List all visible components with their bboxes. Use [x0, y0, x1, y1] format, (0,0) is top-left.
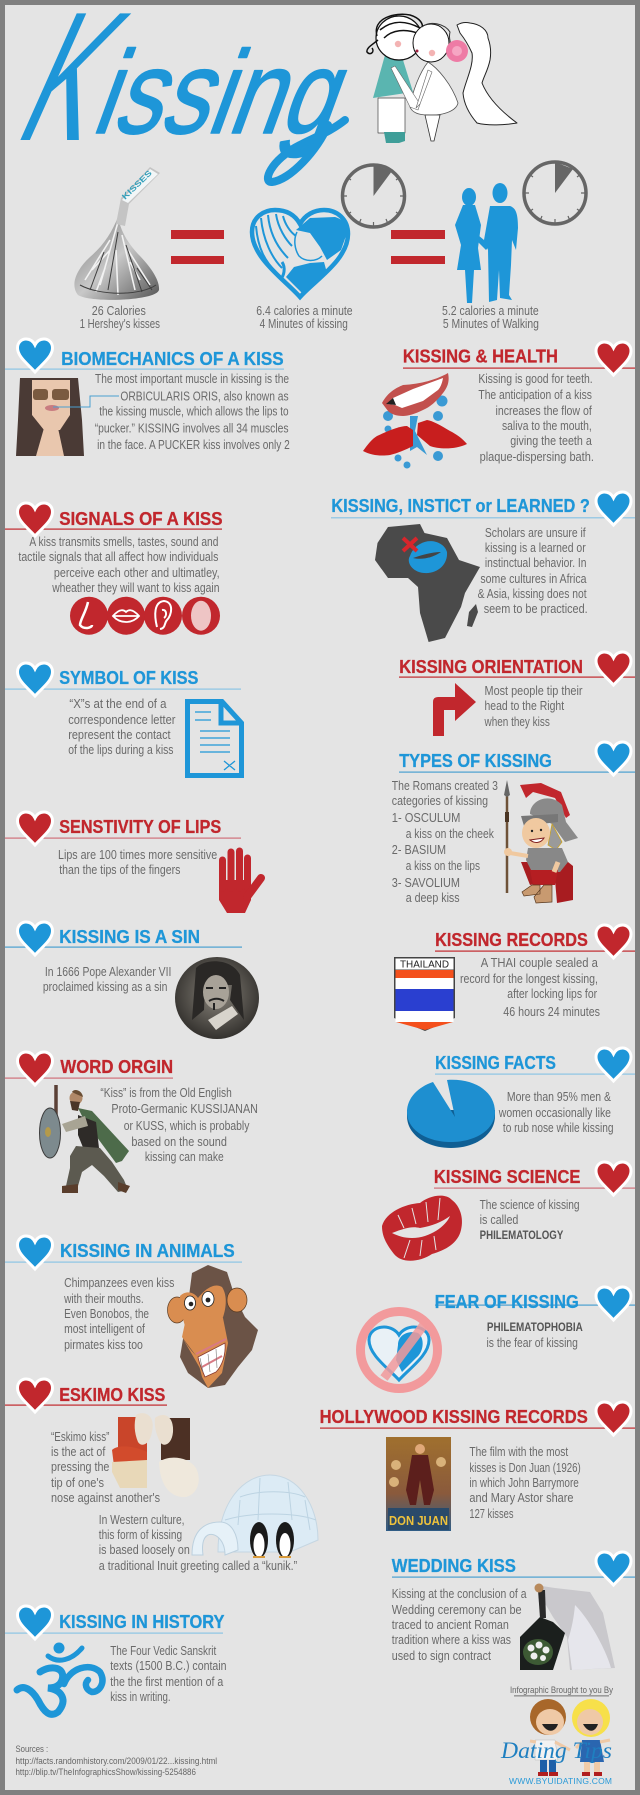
body text: represent the contact	[68, 728, 171, 742]
body text: is the fear of kissing	[486, 1336, 578, 1350]
body text: western culture: a traditional Inuit greeting called a “kunik.”	[99, 1559, 297, 1573]
heading	[5, 1052, 173, 1085]
body text: is the act of	[51, 1445, 106, 1459]
title	[0, 0, 369, 182]
icon: clock, 4 minutes	[342, 165, 404, 227]
panel: signals of a kiss	[5, 503, 222, 635]
panel: kissing is a sin	[5, 922, 259, 1039]
body text: proclaimed kissing as a sin	[43, 980, 167, 994]
logo text: Dating Tips	[500, 1738, 612, 1763]
body text: 46 hours 24 minutes	[503, 1005, 600, 1019]
body text: 1- OSCULUM	[392, 811, 460, 825]
body text: A kiss transmits smells, tastes, sound and	[29, 535, 218, 549]
body text: record for the longest kissing,	[460, 972, 598, 986]
body text	[110, 1644, 227, 1704]
sources: http://blip.tv/TheInfographicsShow/kissing-5254886	[16, 1767, 196, 1777]
body text	[478, 372, 594, 464]
body text: a deep kiss	[406, 891, 460, 905]
body text: used to sign contract	[392, 1649, 491, 1663]
icons: nose, lips, ear, fingerprint	[70, 597, 220, 635]
heading: SENSTIVITY OF LIPS	[59, 816, 221, 837]
body text: kissing can make	[145, 1150, 224, 1164]
illustration: igloo and penguins	[192, 1475, 318, 1558]
panel: symbol of kiss	[5, 663, 242, 776]
body text: instinctual behavior. In	[485, 556, 587, 570]
body text	[63, 1276, 174, 1352]
icon: kissing couple heart	[252, 210, 348, 297]
body text: plaque-dispersing bath.	[480, 450, 594, 464]
icon: walking couple silhouette	[455, 183, 518, 303]
heading	[399, 742, 635, 775]
body text: kissing is a learned or	[485, 541, 586, 555]
sources	[16, 1744, 217, 1777]
icon: first equals sign	[171, 230, 224, 264]
body text	[392, 1587, 527, 1663]
panel: eskimo kiss	[5, 1379, 318, 1573]
heading: KISSING IN ANIMALS	[60, 1240, 235, 1261]
body text: with their mouths.	[63, 1292, 144, 1306]
icon: Thailand flag shield: THAILAND	[400, 958, 449, 970]
heading: HOLLYWOOD KISSING RECORDS	[320, 1406, 588, 1427]
heading	[331, 492, 635, 525]
panel: kissing orientation	[399, 652, 635, 736]
body text: western culture	[99, 1513, 297, 1573]
panel: kissing science	[382, 1162, 635, 1261]
heading: WEDDING KISS	[392, 1555, 516, 1576]
body text	[469, 1445, 581, 1521]
body text: nose against another's	[51, 1491, 160, 1505]
heading	[434, 1162, 635, 1195]
body text: “pucker.” KISSING involves all 34 muscles	[95, 421, 289, 435]
heading: KISSING IN HISTORY	[59, 1611, 225, 1632]
body text: in the face. A PUCKER kiss involves only 2	[97, 438, 290, 452]
icon: om symbol	[17, 1642, 102, 1714]
heading: KISSING IS A SIN	[59, 926, 200, 947]
credit: dating tips logo	[500, 1685, 613, 1786]
heading	[5, 1606, 225, 1639]
body text: Lips are 100 times more sensitive	[58, 848, 217, 862]
calorie captions	[80, 304, 539, 331]
body text	[480, 1198, 580, 1242]
body text: seem to be practiced.	[484, 602, 588, 616]
body text: when they kiss	[484, 715, 550, 729]
body text: Wedding ceremony can be	[392, 1603, 522, 1617]
heading	[5, 339, 284, 372]
body text: of the lips during a kiss	[68, 743, 174, 757]
heading: BIOMECHANICS OF A KISS	[61, 348, 284, 369]
heading	[5, 663, 241, 696]
body text: 127 kisses	[469, 1507, 514, 1521]
body text: head to the Right	[484, 699, 565, 713]
body text	[484, 684, 582, 729]
body text: tip of one's	[51, 1476, 104, 1490]
body text: The Romans created 3	[392, 779, 498, 793]
body text: correspondence letter	[68, 713, 176, 727]
heading: KISSING ORIENTATION	[399, 656, 583, 677]
body text: texts (1500 B.C.) contain	[110, 1659, 227, 1673]
image: wedding couple kissing under veil	[520, 1584, 615, 1670]
body text: The film with the most	[469, 1445, 569, 1459]
body text: most intelligent of	[64, 1322, 145, 1336]
panel: fear of kissing	[360, 1287, 635, 1388]
body text: a kiss on the cheek	[406, 827, 495, 841]
illustration: Africa map with kiss	[375, 524, 480, 642]
heading: KISSING, INSTICT or LEARNED ?	[331, 495, 590, 516]
body text: tradition where a kiss was	[392, 1633, 511, 1647]
body text: than the tips of the fingers	[59, 863, 180, 877]
callout line to lips	[53, 396, 119, 407]
heading	[320, 1402, 635, 1435]
body text: ORBICULARIS ORIS, also known as	[120, 390, 289, 404]
heading	[435, 1287, 635, 1320]
body text: Even Bonobos, the	[64, 1307, 149, 1321]
panel: kissing facts	[407, 1048, 635, 1148]
heading	[399, 652, 635, 685]
body text	[486, 1320, 583, 1350]
panel: types of kissing	[392, 742, 635, 905]
body text: the the first mention of a	[110, 1675, 223, 1689]
panel: kissing records	[394, 925, 635, 1031]
panel: kissing and health	[363, 342, 635, 468]
heading: FEAR OF KISSING	[435, 1291, 579, 1312]
heading	[5, 1379, 167, 1412]
panel: sensitivity of lips	[5, 812, 261, 913]
body text: kiss in writing.	[110, 1690, 171, 1704]
illustration: viking warrior	[40, 1085, 130, 1193]
calorie captions: 5.2 calories a minute	[442, 304, 539, 318]
body text	[498, 1090, 614, 1135]
body text: & Asia, kissing does not	[478, 587, 587, 601]
website: WWW.BYUIDATING.COM	[509, 1776, 612, 1786]
body text: A THAI couple sealed a	[481, 956, 598, 970]
icon: clock, 5 minutes	[524, 162, 586, 224]
body text: PHILEMATOLOGY	[480, 1228, 563, 1242]
panel: kissing in history	[5, 1606, 227, 1714]
calorie captions: 26 Calories	[92, 304, 146, 318]
body text: some cultures in Africa	[480, 572, 587, 586]
body text	[58, 848, 217, 877]
panel: wedding kiss	[392, 1552, 635, 1670]
heading	[392, 1552, 635, 1585]
body text: 3- SAVOLIUM	[392, 876, 460, 890]
body text: More than 95% men &	[507, 1090, 612, 1104]
heading: KISSING & HEALTH	[403, 346, 558, 367]
panel: kissing in animals	[5, 1236, 258, 1388]
body text: traced to ancient Roman	[392, 1618, 509, 1632]
heading	[5, 922, 242, 955]
icon: letter document	[188, 701, 242, 776]
heading	[5, 503, 222, 536]
heading	[435, 925, 635, 958]
body text: Kissing is good for teeth.	[478, 372, 593, 386]
body text: pressing the	[51, 1460, 109, 1474]
panel: biomechanics of a kiss	[5, 339, 290, 456]
body text: is called	[480, 1213, 518, 1227]
title: issing	[81, 26, 369, 158]
body text: giving the teeth a	[510, 434, 592, 448]
body text: Scholars are unsure if	[485, 526, 586, 540]
body text: to rub nose while kissing	[503, 1121, 614, 1135]
heading	[5, 812, 241, 845]
illustration: cartoon couple	[530, 1699, 610, 1776]
body text	[68, 697, 176, 757]
illustration: bride and groom kissing	[367, 14, 517, 143]
illustration: Roman soldier	[504, 780, 578, 903]
body text: Proto-Germanic KUSSIJANAN	[111, 1102, 258, 1116]
calorie captions: 5 Minutes of Walking	[443, 317, 539, 331]
body text	[43, 965, 171, 994]
body text	[51, 1430, 160, 1505]
heading: SIGNALS OF A KISS	[59, 508, 223, 529]
body text: “Eskimo kiss”	[51, 1430, 109, 1444]
heading	[403, 342, 635, 375]
image: eskimo figurines	[112, 1413, 199, 1497]
body text	[392, 779, 498, 905]
body text: The Four Vedic Sanskrit	[110, 1644, 217, 1658]
body text: Most people tip their	[484, 684, 582, 698]
body text	[100, 1086, 258, 1164]
body text: tactile signals that all affect how individuals	[18, 550, 218, 564]
panel: hollywood kissing records	[320, 1402, 635, 1531]
illustration: grinning chimpanzee	[168, 1265, 258, 1388]
heading: KISSING FACTS	[435, 1052, 556, 1073]
heading	[5, 1236, 242, 1269]
heading: TYPES OF KISSING	[399, 750, 552, 771]
body text: western culture: In Western culture,	[99, 1513, 184, 1527]
body text: saliva to the mouth,	[502, 419, 592, 433]
image: portrait of Pope Alexander VII	[175, 957, 259, 1039]
heading: SYMBOL OF KISS	[59, 667, 198, 688]
calorie captions: 1 Hershey's kisses	[80, 317, 160, 331]
image: Don Juan movie poster: DON JUAN	[389, 1513, 448, 1528]
icon: no-kissing sign	[360, 1312, 438, 1388]
body text: 2- BASIUM	[392, 843, 446, 857]
heading: WORD ORGIN	[60, 1056, 173, 1077]
body text: western culture: is based loosely on	[99, 1543, 190, 1557]
body text: categories of kissing	[392, 794, 488, 808]
body text: Chimpanzees even kiss	[64, 1276, 174, 1290]
body text: kisses is Don Juan (1926)	[469, 1461, 581, 1475]
icon: second equals sign	[391, 230, 445, 264]
body text	[18, 535, 220, 595]
icon: lipstick kiss mark	[382, 1196, 462, 1261]
body text: or KUSS, which is probably	[124, 1119, 250, 1133]
icon: Thailand flag shield	[394, 957, 455, 1031]
heading: KISSING SCIENCE	[434, 1166, 580, 1187]
body text: Kissing at the conclusion of a	[392, 1587, 527, 1601]
body text	[478, 526, 588, 616]
heading: ESKIMO KISS	[59, 1384, 165, 1405]
body text: women occasionally like	[498, 1106, 611, 1120]
icon: Hershey's kiss	[74, 167, 160, 300]
body text: and Mary Astor share	[469, 1491, 574, 1505]
body text: perceive each other and ultimatley,	[54, 566, 220, 580]
body text: pirmates kiss too	[64, 1338, 143, 1352]
image: Don Juan movie poster	[386, 1437, 451, 1531]
body text: western culture: this form of kissing	[99, 1528, 182, 1542]
body text: in which John Barrymore	[469, 1476, 579, 1490]
calorie captions: 6.4 calories a minute	[256, 304, 353, 318]
body text	[95, 372, 290, 452]
panel: kissing, instinct or learned	[331, 492, 635, 642]
heading: KISSING RECORDS	[435, 929, 588, 950]
body text: after locking lips for	[507, 987, 597, 1001]
panel: word origin	[5, 1052, 258, 1193]
pie chart: 95 percent	[407, 1080, 495, 1148]
sources: http://facts.randomhistory.com/2009/01/22...kissing.html	[16, 1756, 217, 1766]
icon: red hand	[219, 851, 261, 913]
body text	[460, 956, 600, 1019]
sources: Sources :	[16, 1744, 48, 1754]
icon: right turn arrow	[433, 683, 476, 736]
panel: calorie equivalents	[74, 162, 586, 331]
image: woman in sunglasses	[16, 378, 84, 456]
body text: a kiss on the lips	[406, 859, 480, 873]
body text: based on the sound	[131, 1135, 227, 1149]
body text: In 1666 Pope Alexander VII	[45, 965, 171, 979]
credit line: Infographic Brought to you By	[510, 1685, 613, 1695]
body text: The science of kissing	[480, 1198, 580, 1212]
body text: the kissing muscle, which allows the lips to	[99, 405, 289, 419]
body text: “Kiss” is from the Old English	[100, 1086, 232, 1100]
body text: The most important muscle in kissing is the	[95, 372, 289, 386]
calorie captions: 4 Minutes of kissing	[260, 317, 348, 331]
body text: The anticipation of a kiss	[478, 388, 592, 402]
icon: Hershey's kiss: KISSES	[120, 168, 154, 201]
body text: “X”s at the end of a	[69, 697, 167, 711]
body text: PHILEMATOPHOBIA	[487, 1320, 583, 1334]
body text: increases the flow of	[496, 404, 592, 418]
body text: wheather they will want to kiss again	[51, 581, 220, 595]
illustration: lips and saliva	[363, 373, 467, 468]
heading	[435, 1048, 635, 1081]
